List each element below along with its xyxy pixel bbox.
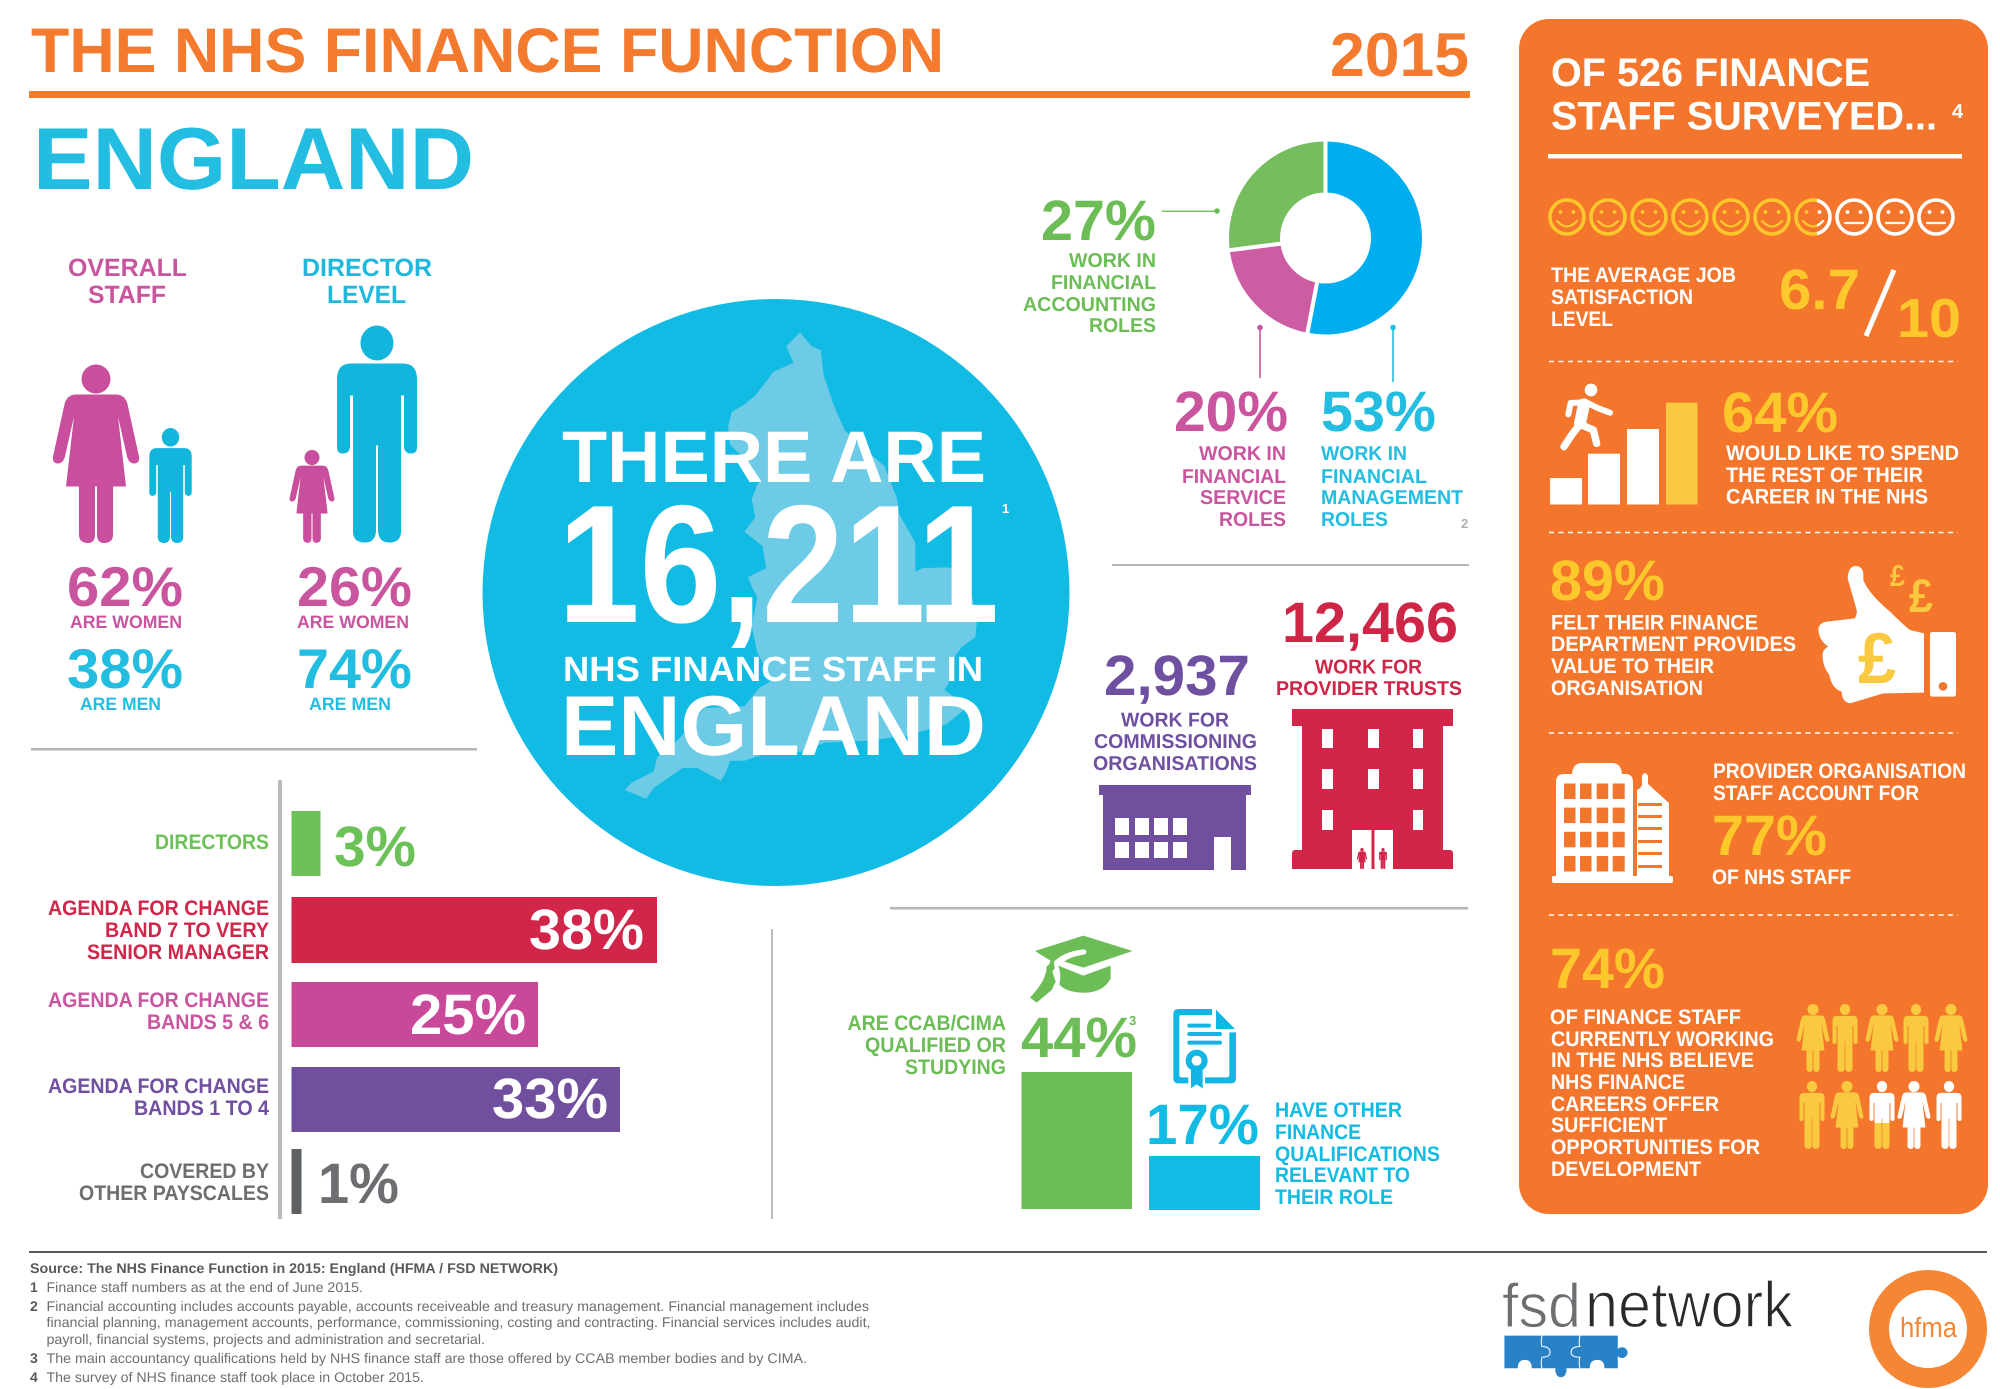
job satisfaction score: 10 bbox=[1897, 287, 1961, 349]
director level heading bbox=[302, 254, 432, 309]
qualified label: QUALIFIED OR bbox=[865, 1034, 1006, 1057]
footnotes: payroll, financial systems, projects and administration and secretarial. bbox=[46, 1331, 485, 1347]
survey heading: STAFF SURVEYED... bbox=[1551, 94, 1937, 138]
overall staff percentages bbox=[67, 555, 183, 714]
commissioning figure: ORGANISATIONS bbox=[1093, 753, 1257, 775]
heading: England: ENGLAND bbox=[33, 109, 474, 208]
qualified label bbox=[848, 1012, 1006, 1079]
survey heading bbox=[1551, 51, 1964, 138]
footnotes: 2 bbox=[30, 1298, 38, 1314]
bar: bands 5 and 6: 25% bbox=[410, 983, 526, 1047]
label: 20 percent service: SERVICE bbox=[1200, 487, 1286, 509]
icon: puzzle pieces bbox=[1504, 1336, 1628, 1377]
job satisfaction text: LEVEL bbox=[1551, 308, 1613, 331]
job satisfaction score bbox=[1779, 258, 1961, 349]
director level heading: DIRECTOR bbox=[302, 254, 432, 282]
headline figure: 1 bbox=[1002, 501, 1009, 516]
other qualifications label: QUALIFICATIONS bbox=[1275, 1143, 1440, 1166]
provider trusts figure: WORK FOR bbox=[1315, 656, 1423, 678]
label: 53 percent management: WORK IN bbox=[1321, 443, 1407, 465]
panel: provider trusts bbox=[1276, 591, 1462, 869]
stat: 74 percent opportunities bbox=[1550, 937, 1774, 1181]
label: 27 percent accounting: ROLES bbox=[1089, 315, 1156, 337]
stat: 74 percent opportunities: CAREERS OFFER bbox=[1551, 1093, 1719, 1116]
label: 20 percent service bbox=[1174, 325, 1288, 531]
bar: 17 percent other: 17% bbox=[1146, 1093, 1259, 1157]
footnotes: 4 bbox=[30, 1369, 38, 1385]
label: 20 percent service: 20% bbox=[1174, 380, 1288, 444]
label: 27 percent accounting bbox=[1023, 189, 1220, 337]
stat: 89 percent value: FELT THEIR FINANCE bbox=[1551, 612, 1758, 634]
headline figure: 16,211 bbox=[558, 470, 999, 658]
icon: thumbs up with pounds bbox=[1818, 560, 1956, 703]
panel: central circle bbox=[482, 299, 1070, 886]
stat: 89 percent value: ORGANISATION bbox=[1551, 677, 1703, 700]
stat: 74 percent opportunities: OPPORTUNITIES FOR bbox=[1551, 1136, 1760, 1159]
stat: 77 percent provider staff bbox=[1712, 760, 1966, 889]
director level percentages bbox=[297, 555, 412, 714]
provider trusts figure: 12,466 bbox=[1282, 591, 1458, 655]
panel: qualifications bbox=[848, 936, 1440, 1210]
bar: bands 5 and 6: BANDS 5 & 6 bbox=[147, 1011, 269, 1034]
chart: role donut bbox=[1023, 140, 1468, 531]
icon: director level woman and man bbox=[290, 326, 417, 543]
overall staff percentages: 38% bbox=[67, 637, 183, 700]
label: 27 percent accounting: FINANCIAL bbox=[1051, 272, 1156, 294]
bar: 44 percent qualified: 3 bbox=[1129, 1013, 1136, 1028]
provider trusts figure: PROVIDER TRUSTS bbox=[1276, 678, 1462, 700]
job satisfaction text bbox=[1551, 264, 1736, 331]
stat: 89 percent value: 89% bbox=[1550, 549, 1665, 613]
icon: ten people pictogram bbox=[1797, 1004, 1967, 1149]
icon: provider buildings bbox=[1552, 763, 1673, 883]
icon: graduation cap bbox=[1030, 936, 1133, 1003]
bar: bands 5 and 6: AGENDA FOR CHANGE bbox=[48, 989, 269, 1012]
panel: commissioning organisations bbox=[1093, 644, 1257, 870]
stat: 77 percent provider staff: 77% bbox=[1712, 804, 1827, 868]
label: 53 percent management: MANAGEMENT bbox=[1321, 487, 1463, 509]
bar: other payscales: 1% bbox=[318, 1152, 399, 1216]
director level percentages: ARE MEN bbox=[309, 694, 391, 714]
footnotes: The survey of NHS finance staff took place in October 2015. bbox=[46, 1369, 424, 1385]
bar: other payscales: COVERED BY bbox=[140, 1160, 269, 1183]
label: 27 percent accounting: WORK IN bbox=[1069, 250, 1156, 272]
stat: 77 percent provider staff: OF NHS STAFF bbox=[1712, 866, 1851, 889]
icon: certificate bbox=[1173, 1009, 1236, 1088]
bar: band 7 to very senior manager: SENIOR MANAGER bbox=[87, 941, 269, 964]
panel: gender split bbox=[53, 254, 432, 714]
director level percentages: 26% bbox=[297, 555, 412, 618]
bar: directors: 3% bbox=[334, 815, 416, 879]
commissioning figure: COMMISSIONING bbox=[1094, 731, 1257, 753]
qualified label: STUDYING bbox=[905, 1056, 1006, 1079]
job satisfaction text: THE AVERAGE JOB bbox=[1551, 264, 1736, 287]
label: 53 percent management bbox=[1321, 325, 1463, 531]
footnotes: Source: The NHS Finance Function in 2015: England (HFMA / FSD NETWORK) bbox=[30, 1260, 558, 1276]
bar: other payscales bbox=[79, 1149, 399, 1216]
commissioning figure: 2,937 bbox=[1104, 644, 1250, 708]
headline figure: ENGLAND bbox=[561, 679, 986, 774]
label: 20 percent service: ROLES bbox=[1219, 509, 1286, 531]
chart: pay band bars bbox=[48, 780, 657, 1219]
bar: directors: DIRECTORS bbox=[155, 831, 269, 854]
icon: runner on stairs bbox=[1550, 384, 1698, 504]
footnotes: Financial accounting includes accounts payable, accounts receiveable and treasury management. Financial management includes bbox=[46, 1298, 869, 1314]
headline figure: NHS FINANCE STAFF IN bbox=[563, 650, 983, 689]
label: 27 percent accounting: ACCOUNTING bbox=[1023, 294, 1156, 316]
bar: bands 5 and 6 bbox=[48, 982, 538, 1047]
stat: 74 percent opportunities: OF FINANCE STAFF bbox=[1550, 1006, 1741, 1029]
director level percentages: 74% bbox=[297, 637, 412, 700]
icon: office building bbox=[1099, 785, 1251, 870]
title: THE NHS FINANCE FUNCTION bbox=[31, 16, 944, 86]
overall staff percentages: ARE MEN bbox=[80, 694, 161, 714]
stat: 74 percent opportunities: 74% bbox=[1550, 937, 1665, 1001]
stat: 89 percent value: DEPARTMENT PROVIDES bbox=[1551, 633, 1796, 656]
label: 20 percent service: WORK IN bbox=[1199, 443, 1286, 465]
other qualifications label: THEIR ROLE bbox=[1275, 1186, 1393, 1209]
footnote marker 2: 2 bbox=[1461, 516, 1468, 531]
label: 27 percent accounting: 27% bbox=[1041, 189, 1156, 253]
map of England bbox=[624, 333, 977, 799]
stat: 74 percent opportunities: DEVELOPMENT bbox=[1551, 1158, 1701, 1181]
job satisfaction text: SATISFACTION bbox=[1551, 286, 1693, 309]
stat: 74 percent opportunities: CURRENTLY WORKING bbox=[1551, 1028, 1774, 1051]
footnotes: The main accountancy qualifications held by NHS finance staff are those offered by CCAB member bodies and by CIMA. bbox=[46, 1350, 807, 1366]
other qualifications label: FINANCE bbox=[1275, 1121, 1361, 1144]
label: 53 percent management: FINANCIAL bbox=[1321, 466, 1427, 488]
stat: 74 percent opportunities: NHS FINANCE bbox=[1551, 1071, 1685, 1094]
bar: 17 percent other bbox=[1146, 1093, 1260, 1210]
stat: 64 percent career: THE REST OF THEIR bbox=[1726, 464, 1923, 487]
label: 20 percent service: FINANCIAL bbox=[1182, 466, 1286, 488]
bar: bands 1 to 4: BANDS 1 TO 4 bbox=[134, 1097, 269, 1120]
overall staff heading: STAFF bbox=[88, 281, 166, 309]
logo: hfma bbox=[1879, 1280, 1977, 1378]
icon: hospital building bbox=[1292, 709, 1453, 869]
bar: 44 percent qualified: 44% bbox=[1021, 1006, 1137, 1070]
bar: directors bbox=[155, 811, 416, 879]
icon: thumbs up with pounds: £ bbox=[1909, 569, 1933, 622]
overall staff percentages: 62% bbox=[67, 555, 183, 618]
bar: band 7 to very senior manager: BAND 7 TO VERY bbox=[105, 919, 269, 942]
bar: band 7 to very senior manager bbox=[48, 897, 657, 964]
other qualifications label: HAVE OTHER bbox=[1275, 1099, 1402, 1122]
overall staff heading bbox=[68, 254, 187, 309]
label: 53 percent management: 53% bbox=[1321, 380, 1436, 444]
bar: band 7 to very senior manager: 38% bbox=[529, 898, 644, 962]
footnotes bbox=[30, 1260, 870, 1385]
footnotes: Finance staff numbers as at the end of June 2015. bbox=[46, 1279, 363, 1295]
commissioning figure: WORK FOR bbox=[1121, 710, 1230, 732]
headline figure: THERE ARE bbox=[562, 417, 986, 498]
label: 53 percent management: ROLES bbox=[1321, 509, 1388, 531]
icon: thumbs up with pounds: £ bbox=[1858, 619, 1896, 699]
logo: fsd network: network bbox=[1585, 1268, 1793, 1341]
bar: bands 1 to 4 bbox=[48, 1067, 620, 1132]
qualified label: ARE CCAB/CIMA bbox=[848, 1012, 1006, 1035]
stat: 64 percent career: 64% bbox=[1722, 381, 1838, 445]
bar: band 7 to very senior manager: AGENDA FOR CHANGE bbox=[48, 897, 269, 920]
bar: bands 1 to 4: AGENDA FOR CHANGE bbox=[48, 1075, 269, 1098]
stat: 64 percent career bbox=[1722, 381, 1959, 508]
footnotes: 3 bbox=[30, 1350, 38, 1366]
footnotes: 1 bbox=[30, 1279, 38, 1295]
icon: overall staff woman and man bbox=[53, 364, 192, 543]
bar: other payscales: OTHER PAYSCALES bbox=[79, 1182, 269, 1205]
logo: fsd network: fsd bbox=[1502, 1272, 1581, 1341]
director level heading: LEVEL bbox=[327, 281, 406, 309]
overall staff heading: OVERALL bbox=[68, 254, 187, 282]
director level percentages: ARE WOMEN bbox=[297, 612, 409, 632]
stat: 74 percent opportunities: IN THE NHS BELIEVE bbox=[1551, 1049, 1754, 1072]
icon: thumbs up with pounds: £ bbox=[1890, 560, 1905, 593]
stat: 64 percent career: WOULD LIKE TO SPEND bbox=[1726, 442, 1959, 465]
stat: 64 percent career: CAREER IN THE NHS bbox=[1726, 486, 1928, 508]
survey heading: 4 bbox=[1952, 101, 1964, 123]
panel: survey results bbox=[1519, 19, 1988, 1214]
provider trusts figure bbox=[1276, 591, 1462, 700]
survey heading: OF 526 FINANCE bbox=[1551, 51, 1870, 95]
footnotes: financial planning, management accounts, performance, commissioning, costing and contracting. Financial services includes audit, bbox=[46, 1314, 870, 1330]
commissioning figure bbox=[1093, 644, 1257, 775]
stat: 77 percent provider staff: PROVIDER ORGANISATION bbox=[1713, 760, 1966, 783]
logo: hfma: hfma bbox=[1900, 1312, 1957, 1343]
headline figure bbox=[558, 417, 1009, 774]
stat: 74 percent opportunities: SUFFICIENT bbox=[1551, 1114, 1667, 1137]
other qualifications label: RELEVANT TO bbox=[1275, 1164, 1410, 1187]
bar: 44 percent qualified bbox=[1021, 1006, 1137, 1209]
job satisfaction score: 6.7 bbox=[1779, 258, 1860, 322]
icon: satisfaction smileys bbox=[1550, 200, 1953, 234]
year: 2015 bbox=[1330, 21, 1469, 90]
stat: 89 percent value bbox=[1550, 549, 1796, 700]
stat: 77 percent provider staff: STAFF ACCOUNT FOR bbox=[1713, 782, 1919, 805]
overall staff percentages: ARE WOMEN bbox=[70, 612, 182, 632]
bar: bands 1 to 4: 33% bbox=[492, 1067, 608, 1131]
logo: fsd network bbox=[1502, 1268, 1793, 1377]
other qualifications label bbox=[1275, 1099, 1440, 1209]
stat: 89 percent value: VALUE TO THEIR bbox=[1551, 655, 1714, 678]
